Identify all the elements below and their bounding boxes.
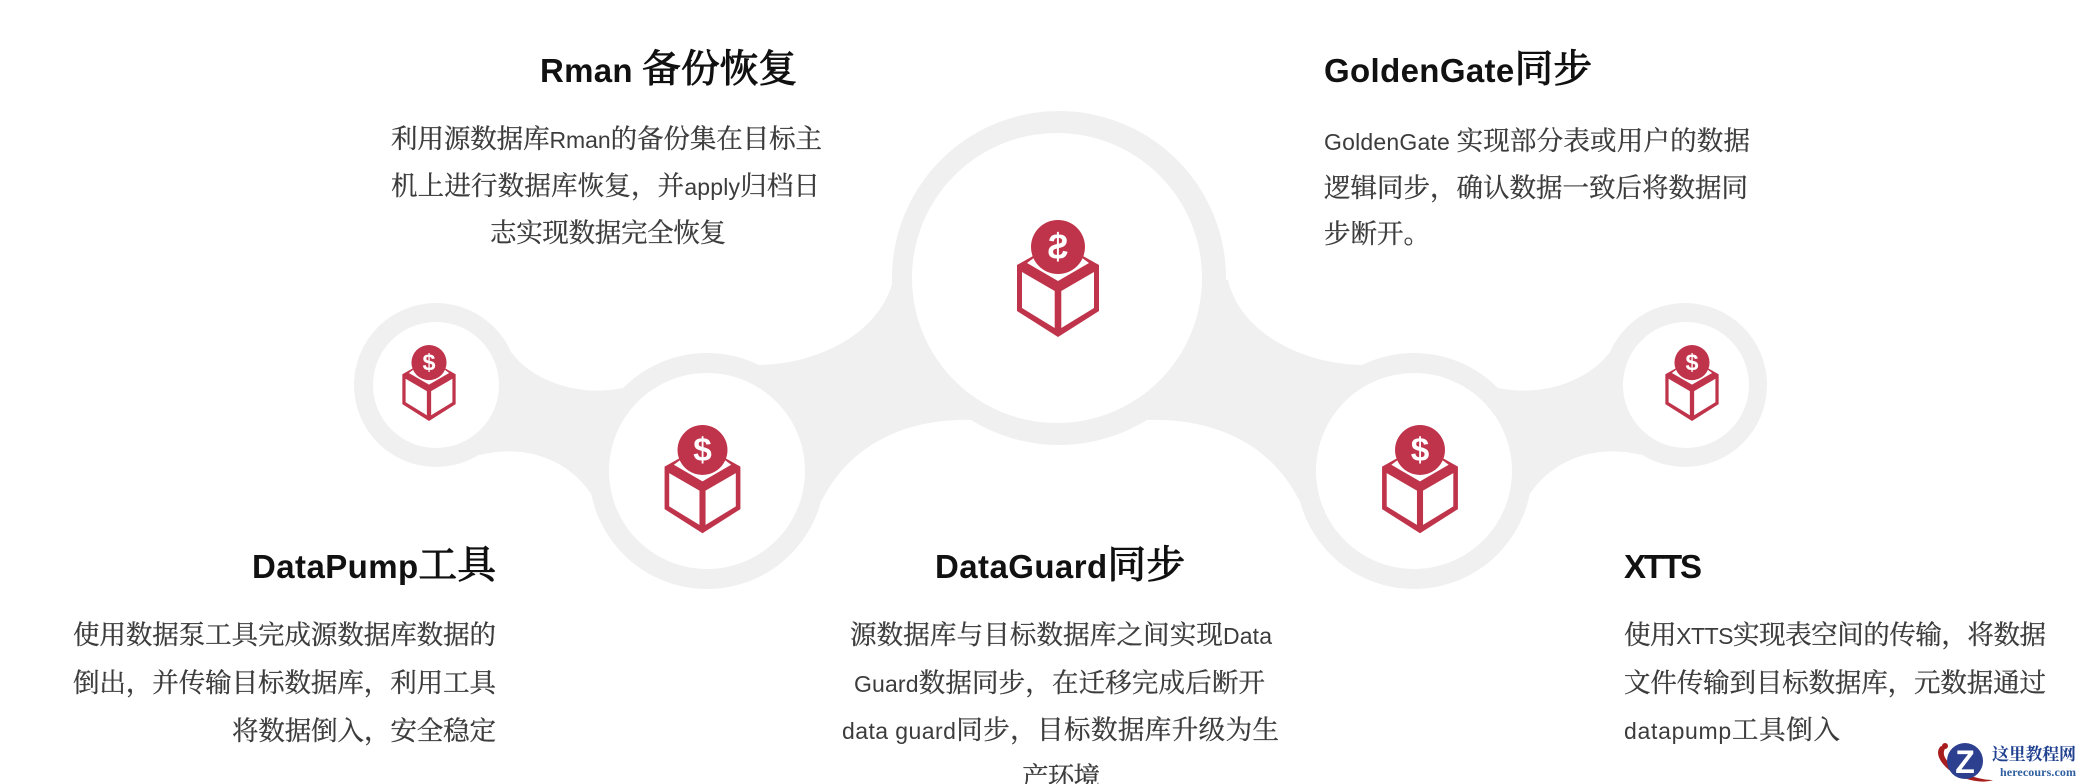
text block: GoldenGate bbox=[1324, 119, 1750, 251]
text block: XTTS: 文件传输到目标数据库，元数据通过 bbox=[1624, 661, 2046, 700]
text block: Rman: 利用源数据库Rman的备份集在目标主 bbox=[391, 117, 822, 156]
text block: Rman bbox=[391, 117, 822, 250]
heading: DataPump: DataPump工具 bbox=[252, 535, 497, 590]
heading: XTTS: XTTS bbox=[1624, 548, 1702, 585]
icon: center coin box bbox=[1017, 220, 1099, 337]
text block: DataGuard: 源数据库与目标数据库之间实现Data bbox=[850, 613, 1272, 652]
heading: GoldenGate: GoldenGate同步 bbox=[1324, 39, 1592, 94]
text block: XTTS bbox=[1624, 613, 2046, 747]
icon: right middle coin box: $ bbox=[1411, 432, 1430, 469]
text block: XTTS: datapump工具倒入 bbox=[1624, 708, 1840, 747]
icon: right middle coin box bbox=[1382, 425, 1458, 533]
text block: DataGuard: Guard数据同步，在迁移完成后断开 bbox=[854, 661, 1265, 700]
text block: DataPump: 将数据倒入，安全稳定 bbox=[232, 709, 496, 748]
network background shape bbox=[354, 111, 1767, 589]
text block: GoldenGate: GoldenGate 实现部分表或用户的数据 bbox=[1324, 119, 1750, 158]
text block: DataPump: 使用数据泵工具完成源数据库数据的 bbox=[73, 613, 496, 652]
text block: GoldenGate: 步断开。 bbox=[1324, 212, 1430, 251]
text block: GoldenGate: 逻辑同步，确认数据一致后将数据同 bbox=[1324, 166, 1748, 205]
icon: left middle coin box: $ bbox=[693, 432, 712, 469]
text block: DataGuard bbox=[842, 613, 1279, 784]
icon: right small coin box: $ bbox=[1685, 349, 1699, 375]
watermark logo: 这里教程网 bbox=[1992, 740, 2076, 765]
text block: DataGuard: data guard同步，目标数据库升级为生 bbox=[842, 708, 1279, 747]
text block: Rman: 志实现数据完全恢复 bbox=[490, 211, 726, 250]
heading: DataGuard: DataGuard同步 bbox=[935, 535, 1185, 590]
icon: center coin box: $ bbox=[1048, 226, 1068, 267]
heading: Rman: Rman 备份恢复 bbox=[540, 39, 797, 94]
icon: right small coin box bbox=[1665, 345, 1719, 421]
text block: DataPump bbox=[73, 613, 498, 748]
watermark logo: Z bbox=[1955, 744, 1975, 780]
text block: XTTS: 使用XTTS实现表空间的传输，将数据 bbox=[1624, 613, 2046, 652]
icon: left middle coin box bbox=[665, 425, 740, 533]
text block: DataPump: 倒出，并传输目标数据库，利用工具 bbox=[73, 661, 498, 700]
watermark logo: herecours.com bbox=[2000, 765, 2076, 779]
icon: left small coin box: $ bbox=[422, 349, 436, 375]
icon: left small coin box bbox=[402, 345, 456, 421]
text block: Rman: 机上进行数据库恢复，并apply归档日 bbox=[391, 164, 820, 203]
watermark logo bbox=[1932, 740, 2082, 784]
